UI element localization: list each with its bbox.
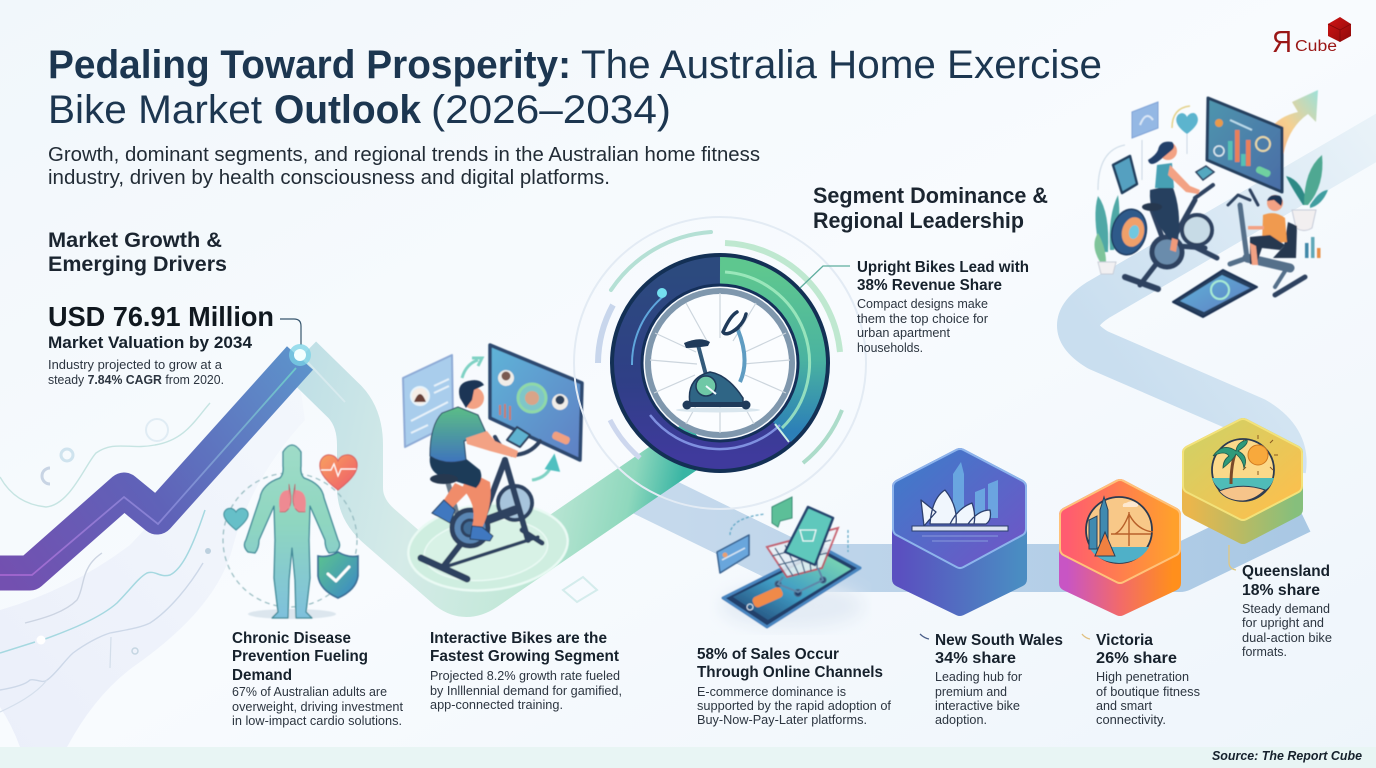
text: online channels: supported by the rapid adoption of	[697, 699, 892, 713]
text: Queensland	[1229, 545, 1332, 659]
icon: shopping cart	[767, 528, 838, 596]
text: upright bikes: them the top choice for	[857, 312, 988, 326]
text: Victoria: 26% share	[1096, 650, 1177, 667]
text: online channels: Through Online Channels	[697, 664, 883, 681]
text: interactive bikes: Projected 8.2% growth rate fueled	[430, 669, 620, 683]
man on recumbent bike	[1228, 190, 1305, 295]
title: Bike Market	[48, 88, 262, 132]
growth arrows	[462, 358, 558, 480]
connector: upright bikes callout	[800, 266, 850, 288]
right plant	[1286, 155, 1328, 230]
logo: RCube: Cube	[1295, 38, 1337, 55]
text: chronic disease: 67% of Australian adults are	[232, 685, 387, 699]
icon: check shield	[318, 552, 358, 598]
text: online channels: Buy-Now-Pay-Later platforms.	[697, 713, 867, 727]
title: Pedaling Toward Prosperity:	[48, 43, 571, 87]
small floating cards	[1098, 102, 1198, 193]
text: Queensland: 18% share	[1242, 582, 1320, 599]
title: The Australia Home Exercise	[581, 43, 1102, 87]
text: upright bikes: Compact designs make	[857, 297, 988, 311]
ribbon: teal pathway into wheel	[300, 358, 700, 594]
title: Outlook	[274, 88, 422, 132]
text: Queensland: formats.	[1242, 645, 1287, 659]
text: New South Wales	[920, 632, 1063, 727]
text: online channels	[697, 646, 892, 727]
text: Queensland: Steady demand	[1242, 602, 1330, 616]
text: chronic disease: overweight, driving investment	[232, 700, 404, 714]
stat: market valuation: USD 76.91 Million	[48, 301, 274, 332]
logo: RCube	[1272, 17, 1351, 59]
hexagon: Queensland	[1190, 426, 1295, 536]
icon: small teal heart	[224, 508, 248, 530]
title	[48, 43, 1102, 132]
text: Queensland: Queensland	[1242, 563, 1330, 580]
side profile panel	[403, 355, 453, 447]
text: chronic disease: Prevention Fueling	[232, 648, 368, 665]
text: upright bikes: households.	[857, 341, 923, 355]
interactive screen	[490, 345, 582, 460]
heading: market growth: Market Growth &	[48, 229, 222, 252]
heading: segment dominance: Segment Dominance &	[813, 183, 1048, 208]
text: Victoria: Victoria	[1096, 632, 1153, 649]
illustration: rider on interactive bike	[403, 345, 582, 598]
text: upright bikes: 38% Revenue Share	[857, 277, 1002, 294]
illustration: home fitness scene top right	[1094, 90, 1328, 317]
text: online channels: E-commerce dominance is	[697, 685, 846, 699]
icon: Sydney Opera House	[912, 462, 1008, 541]
stat: market valuation: steady 7.84% CAGR from 2020.	[48, 373, 224, 387]
text: Queensland: for upright and	[1242, 616, 1324, 630]
text: upright bikes: urban apartment	[857, 326, 951, 340]
text: Victoria: of boutique fitness	[1096, 685, 1200, 699]
pale background swooshes	[0, 385, 305, 747]
text: interactive bikes: by Inlllennial demand for gamified,	[430, 684, 622, 698]
icon: upright exercise bike	[676, 312, 760, 412]
text: upright bikes	[857, 259, 1029, 355]
heading: segment dominance	[813, 183, 1048, 233]
phone in cart	[785, 507, 833, 565]
text: interactive bikes: Fastest Growing Segment	[430, 648, 619, 665]
colourful arrow	[1262, 90, 1318, 165]
illustration: human body health	[223, 445, 358, 619]
text: Victoria	[1082, 632, 1200, 727]
chart: wheel with 38 percent arc	[574, 217, 866, 509]
text: Victoria: connectivity.	[1096, 713, 1166, 727]
text: interactive bikes	[430, 630, 622, 712]
green tag	[772, 497, 792, 527]
heading: segment dominance: Regional Leadership	[813, 208, 1024, 233]
spokes	[650, 293, 790, 433]
logo: RCube: Я	[1272, 24, 1292, 59]
text: New South Wales: Leading hub for	[935, 670, 1022, 684]
text: interactive bikes: Interactive Bikes are the	[430, 630, 607, 647]
text: chronic disease	[232, 630, 404, 728]
illustration: online shopping phone and cart	[717, 497, 864, 628]
text: Victoria: and smart	[1096, 699, 1153, 713]
text: Queensland: dual-action bike	[1242, 631, 1332, 645]
heading: market growth	[48, 229, 227, 276]
connector: valuation marker	[280, 319, 311, 366]
text: chronic disease: in low-impact cardio solutions.	[232, 714, 402, 728]
icon: heart with pulse	[320, 455, 357, 490]
decorative diamond outline	[563, 577, 597, 602]
text: interactive bikes: app-connected training.	[430, 698, 563, 712]
subtitle: Growth, dominant segments, and regional trends in the Australian home fitness	[48, 144, 760, 166]
left plant and disc	[1094, 195, 1151, 274]
source note: Source: The Report Cube	[1212, 749, 1362, 763]
hexagon: Victoria	[1067, 487, 1173, 608]
icon: Melbourne skyline and bridge	[1086, 497, 1153, 563]
text: chronic disease: Demand	[232, 667, 292, 684]
subtitle: industry, driven by health consciousness and digital platforms.	[48, 167, 610, 189]
text: New South Wales: 34% share	[935, 650, 1016, 667]
hexagon: New South Wales	[900, 456, 1019, 608]
text: Victoria: High penetration	[1096, 670, 1189, 684]
footer strip	[0, 747, 1376, 768]
icon: beach	[1212, 435, 1278, 501]
credit card	[717, 535, 749, 573]
text: New South Wales: New South Wales	[935, 632, 1063, 649]
back ribbon: light blue pathway top right	[1078, 124, 1376, 470]
text: online channels: 58% of Sales Occur	[697, 646, 839, 663]
bike frame	[421, 437, 542, 579]
subtitle	[48, 144, 760, 189]
stat: market valuation: Market Valuation by 2034	[48, 333, 253, 352]
mini bars	[1305, 237, 1320, 258]
tablet	[1173, 270, 1257, 317]
title: (2026–2034)	[431, 88, 671, 132]
heading: market growth: Emerging Drivers	[48, 253, 227, 276]
text: New South Wales: interactive bike	[935, 699, 1020, 713]
rider	[430, 380, 530, 541]
text: chronic disease: Chronic Disease	[232, 630, 351, 647]
woman on bike	[1125, 142, 1217, 289]
text: New South Wales: adoption.	[935, 713, 987, 727]
ribbon: horizontal regional band	[640, 490, 1300, 568]
dashboard screen	[1207, 98, 1282, 192]
stat: market valuation	[48, 301, 274, 387]
text: New South Wales: premium and	[935, 685, 1007, 699]
text: upright bikes: Upright Bikes Lead with	[857, 259, 1029, 276]
ribbon: purple growth line	[0, 354, 345, 575]
stat: market valuation: Industry projected to grow at a	[48, 358, 222, 372]
